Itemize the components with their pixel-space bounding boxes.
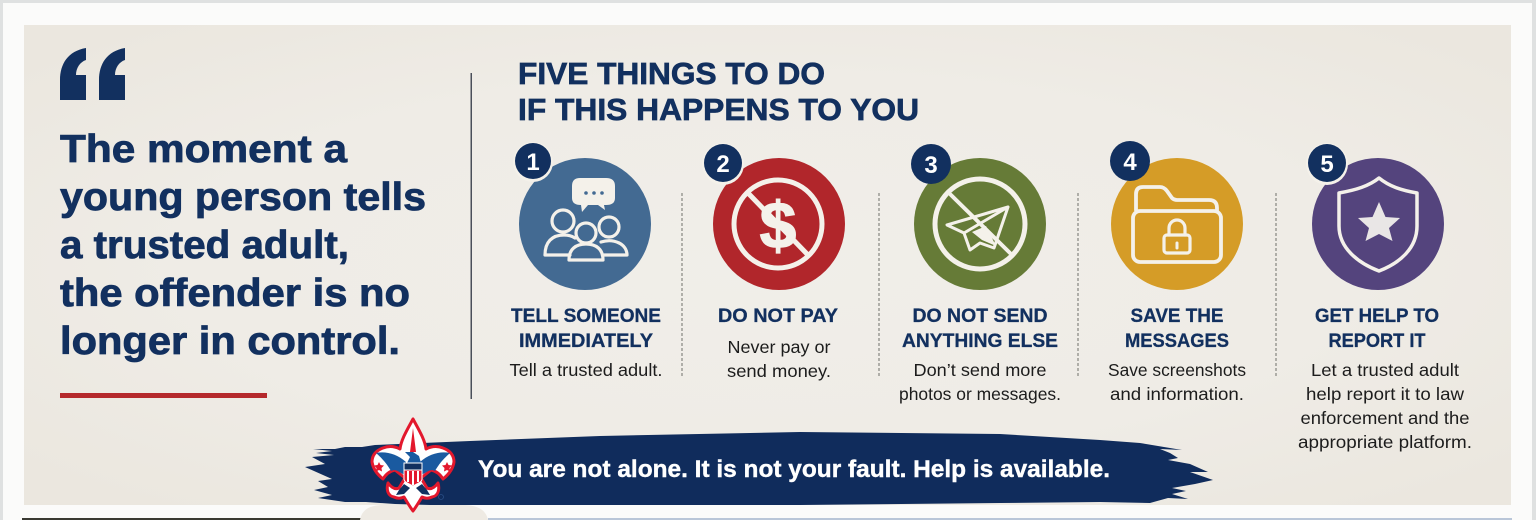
step 2 description: [727, 337, 831, 381]
number badge 3: [911, 144, 951, 184]
quote text: longer in control.: [60, 320, 400, 363]
step 2: do not pay: [702, 143, 845, 381]
step 4 description: Save screenshots: [1108, 360, 1246, 380]
step 4 description: and information.: [1110, 384, 1244, 404]
number badge 4: 4: [1123, 149, 1137, 176]
number badge 1: [513, 142, 553, 182]
step 5 title: GET HELP TO: [1315, 305, 1439, 327]
top petal spike: [410, 428, 416, 452]
icon: crossed-out dollar: [713, 158, 845, 290]
quote text: young person tells: [60, 176, 426, 219]
icon: fleur-de-lis emblem: [372, 419, 454, 511]
wing stars: [374, 462, 384, 472]
banner text: You are not alone. It is not your fault. Help is available.: [478, 456, 1110, 483]
step 4 title: SAVE THE: [1130, 305, 1224, 327]
icon: locked folder: [1111, 158, 1243, 290]
step 3 description: [899, 360, 1061, 404]
step 5 description: [1298, 360, 1472, 452]
step 4: save the messages: [1108, 141, 1246, 404]
eagle head: [405, 452, 421, 463]
step 5: get help to report it: [1298, 143, 1472, 452]
quote text: a trusted adult,: [60, 224, 349, 267]
quote text: The moment a: [60, 128, 347, 171]
step 3 title: [902, 305, 1058, 352]
step 2 title: DO NOT PAY: [718, 305, 838, 327]
step 5 description: Let a trusted adult: [1311, 360, 1459, 380]
icon: people with speech bubble: [519, 158, 651, 290]
icon: quotation mark: [60, 48, 125, 100]
step 5 description: help report it to law: [1306, 384, 1464, 404]
step 4 title: [1125, 305, 1229, 352]
icon: shield with star: [1312, 158, 1444, 290]
heading: IF THIS HAPPENS TO YOU: [518, 92, 919, 127]
step 3 description: photos or messages.: [899, 384, 1061, 404]
brush stroke: [305, 432, 1213, 505]
icon: crossed-out paper plane: [914, 158, 1046, 290]
step 3 title: DO NOT SEND: [912, 305, 1048, 327]
step 1 title: TELL SOMEONE: [511, 305, 661, 327]
step 4 description: [1108, 360, 1246, 404]
step 3: do not send: [899, 144, 1061, 404]
number badge 2: 2: [716, 151, 730, 178]
step 2 description: Never pay or: [728, 337, 831, 357]
number badge 4: [1110, 141, 1150, 181]
step 2 description: send money.: [727, 361, 831, 381]
icon: crossed-out dollar: $: [760, 188, 796, 262]
step 1 title: IMMEDIATELY: [519, 330, 653, 352]
step 5 title: [1315, 305, 1439, 352]
number badge 2: [702, 143, 744, 185]
step 1: tell someone: [510, 142, 662, 380]
eagle wings: [376, 452, 450, 475]
step 1 title: [511, 305, 661, 352]
step 3 title: ANYTHING ELSE: [902, 330, 1058, 352]
quote text: the offender is no: [60, 272, 410, 315]
step 1 description: Tell a trusted adult.: [510, 360, 662, 380]
shield: [404, 463, 422, 470]
number badge 1: 1: [526, 149, 540, 176]
red accent rule: [60, 393, 267, 398]
step 5 description: enforcement and the: [1300, 408, 1470, 428]
heading: FIVE THINGS TO DO: [518, 56, 825, 91]
step 5 description: appropriate platform.: [1298, 432, 1472, 452]
quote panel: [60, 48, 426, 398]
number badge 5: [1306, 143, 1348, 185]
step 5 title: REPORT IT: [1328, 330, 1426, 352]
step 3 description: Don’t send more: [914, 360, 1046, 380]
heading: [518, 56, 919, 127]
banner: [305, 419, 1213, 511]
quote text: [60, 128, 426, 363]
number badge 5: 5: [1320, 151, 1334, 178]
number badge 3: 3: [924, 152, 938, 179]
eagle legs: [396, 484, 430, 495]
step 4 title: MESSAGES: [1125, 330, 1229, 352]
